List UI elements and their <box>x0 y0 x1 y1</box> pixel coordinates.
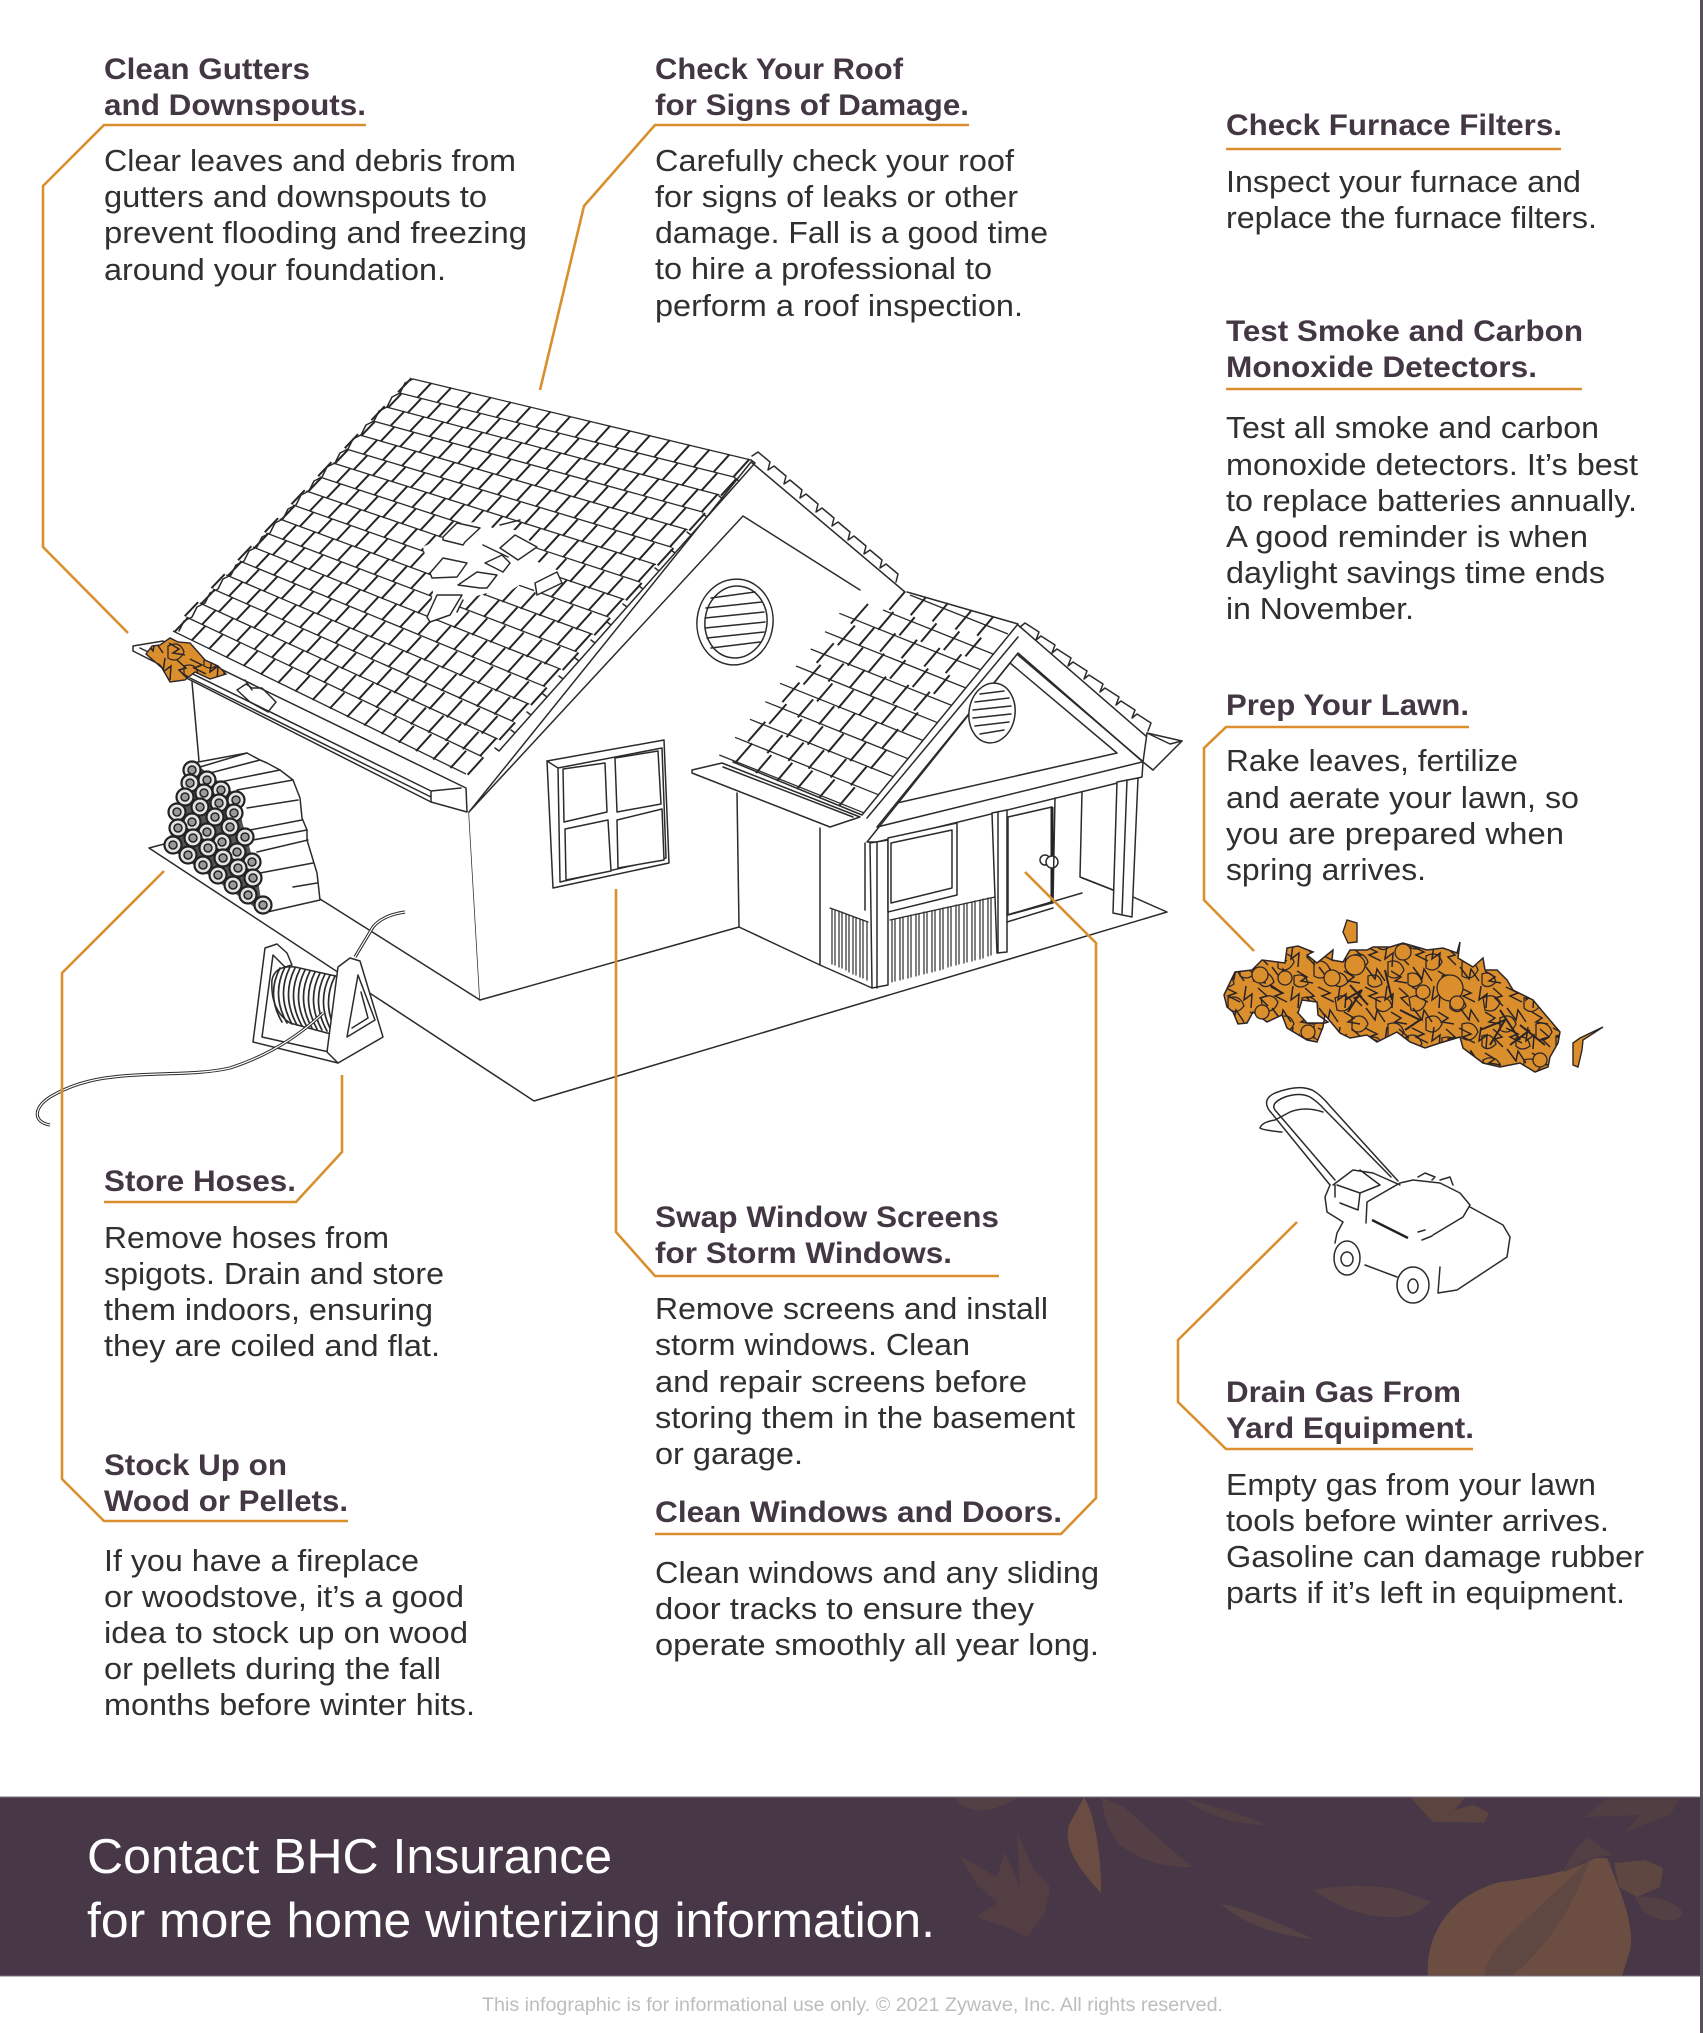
scribbled leaf detail <box>1224 942 1560 1072</box>
heading: and Downspouts. <box>104 89 366 122</box>
callout line: gutters <box>43 125 366 633</box>
body <box>104 1543 475 1722</box>
callout line: furnace <box>1226 148 1561 150</box>
body: storing them in the basement <box>655 1400 1075 1435</box>
body <box>104 1220 444 1363</box>
small roof shingles <box>719 592 1018 815</box>
body: spigots. Drain and store <box>104 1256 444 1291</box>
log sides <box>193 753 320 913</box>
body: damage. Fall is a good time <box>655 215 1048 250</box>
body: Gasoline can damage rubber <box>1226 1539 1644 1574</box>
front wall and main gable <box>469 516 895 1000</box>
heading: Check Furnace Filters. <box>1226 109 1562 142</box>
body <box>1226 1467 1644 1610</box>
text block: clean gutters <box>104 53 527 287</box>
body: idea to stock up on wood <box>104 1615 468 1650</box>
main roof shingles <box>171 378 755 775</box>
body: to hire a professional to <box>655 251 992 286</box>
heading: Monoxide Detectors. <box>1226 351 1537 384</box>
body: and aerate your lawn, so <box>1226 780 1579 815</box>
upper hose <box>355 912 405 957</box>
illustration: leaf pile <box>1224 920 1603 1072</box>
front frame <box>327 958 383 1063</box>
text block: furnace filters <box>1226 109 1597 235</box>
small gable vent <box>965 680 1019 746</box>
body: tools before winter arrives. <box>1226 1503 1609 1538</box>
rear wheel <box>1397 1267 1429 1303</box>
body: Test all smoke and carbon <box>1226 410 1599 445</box>
body <box>655 143 1048 323</box>
callout line: lawn <box>1204 727 1469 951</box>
callout line: window screens <box>616 889 999 1276</box>
body: or pellets during the fall <box>104 1651 441 1686</box>
illustration: stacked firewood <box>164 753 320 914</box>
gutter leaves clog <box>146 638 226 682</box>
banner text: Contact BHC Insurance <box>87 1830 612 1884</box>
callout line: roof <box>540 125 969 390</box>
body: door tracks to ensure they <box>655 1591 1035 1626</box>
heading: for Signs of Damage. <box>655 89 969 122</box>
page edge line <box>1700 0 1703 2033</box>
heading: Prep Your Lawn. <box>1226 689 1469 722</box>
body <box>1226 164 1597 235</box>
heading: Stock Up on <box>104 1449 287 1482</box>
round attic vent <box>691 574 779 670</box>
heading: Drain Gas From <box>1226 1376 1461 1409</box>
recessed wall <box>820 790 1082 985</box>
text block: stock wood <box>104 1449 475 1722</box>
heading: Wood or Pellets. <box>104 1485 348 1518</box>
disclaimer: This infographic is for informational use only. © 2021 Zywave, Inc. All rights reserved. <box>482 1995 1223 2016</box>
lattice fence right <box>890 897 995 982</box>
heading: Clean Gutters <box>104 53 310 86</box>
heading: Test Smoke and Carbon <box>1226 315 1583 348</box>
small rake tiles and end cap <box>1020 623 1182 770</box>
heading: Store Hoses. <box>104 1165 296 1198</box>
porch window <box>888 823 957 912</box>
left gutter <box>133 641 467 812</box>
body <box>104 143 527 287</box>
illustration: lawn mower <box>1260 1088 1510 1303</box>
body: to replace batteries annually. <box>1226 483 1637 518</box>
text block: window screens <box>655 1201 1075 1471</box>
heading: Yard Equipment. <box>1226 1412 1474 1445</box>
heading: Check Your Roof <box>655 53 904 86</box>
decorative leaves <box>954 1797 1683 1976</box>
body: they are coiled and flat. <box>104 1328 440 1363</box>
heading <box>104 53 366 122</box>
lattice fence left <box>830 908 868 980</box>
heading <box>1226 315 1583 384</box>
illustration: hose reel <box>37 912 405 1125</box>
heading <box>655 53 969 122</box>
front wheel <box>1334 1241 1360 1275</box>
body: replace the furnace filters. <box>1226 200 1597 235</box>
log ends <box>164 762 272 914</box>
small gable face <box>867 653 1143 842</box>
hose coil <box>272 967 340 1035</box>
porch posts <box>1113 778 1138 917</box>
body: for signs of leaks or other <box>655 179 1018 214</box>
heading <box>655 1201 999 1270</box>
body <box>655 1291 1075 1471</box>
body: parts if it’s left in equipment. <box>1226 1575 1625 1610</box>
text block: clean windows <box>655 1496 1099 1662</box>
body: gutters and downspouts to <box>104 179 487 214</box>
body: or woodstove, it’s a good <box>104 1579 464 1614</box>
body: you are prepared when <box>1226 816 1564 851</box>
text block: smoke detectors <box>1226 315 1638 626</box>
banner edges <box>0 1797 1700 1976</box>
body: Remove hoses from <box>104 1220 389 1255</box>
text block: prep lawn <box>1226 689 1579 887</box>
body: A good reminder is when <box>1226 519 1588 554</box>
heading <box>1226 1376 1474 1445</box>
gutter debris <box>237 680 276 712</box>
body: Remove screens and install <box>655 1291 1048 1326</box>
body: storm windows. Clean <box>655 1327 970 1362</box>
body: If you have a fireplace <box>104 1543 419 1578</box>
body: spring arrives. <box>1226 852 1426 887</box>
porch and small gable <box>820 625 1153 988</box>
body: perform a roof inspection. <box>655 288 1023 323</box>
body: daylight savings time ends <box>1226 555 1605 590</box>
callout line: windows and doors <box>655 872 1096 1534</box>
footer banner <box>0 1797 1700 1976</box>
body: in November. <box>1226 591 1414 626</box>
body: Carefully check your roof <box>655 143 1014 178</box>
body: around your foundation. <box>104 252 446 287</box>
body: or garage. <box>655 1436 803 1471</box>
text block: check your roof <box>655 53 1048 323</box>
door <box>1008 807 1058 915</box>
body <box>1226 410 1638 626</box>
illustration: house <box>133 378 1182 1101</box>
text block: drain gas <box>1226 1376 1644 1610</box>
callout line: yard equipment <box>1178 1222 1473 1449</box>
lower hose <box>37 1013 323 1125</box>
body <box>1226 743 1579 887</box>
banner text <box>87 1830 935 1948</box>
body: monoxide detectors. It’s best <box>1226 447 1638 482</box>
body: Clean windows and any sliding <box>655 1555 1099 1590</box>
main window <box>547 740 669 888</box>
roof damage patch <box>423 520 562 622</box>
body: them indoors, ensuring <box>104 1292 433 1327</box>
heading: Clean Windows and Doors. <box>655 1496 1062 1529</box>
banner text: for more home winterizing information. <box>87 1894 935 1948</box>
body: Empty gas from your lawn <box>1226 1467 1596 1502</box>
small gutter <box>692 763 860 827</box>
body: Rake leaves, fertilize <box>1226 743 1518 778</box>
heading: Swap Window Screens <box>655 1201 999 1234</box>
stray leaves <box>1343 920 1357 943</box>
callout line: detectors <box>1226 388 1582 390</box>
body: prevent flooding and freezing <box>104 215 527 250</box>
mower handle <box>1260 1088 1398 1185</box>
left wall <box>192 682 480 1000</box>
foundation slab <box>149 843 1167 1101</box>
body: operate smoothly all year long. <box>655 1627 1099 1662</box>
body: months before winter hits. <box>104 1687 475 1722</box>
mower body <box>1325 1170 1510 1293</box>
body: Clear leaves and debris from <box>104 143 516 178</box>
dense dark scribbles <box>1270 970 1545 1045</box>
callout line: hoses <box>104 1075 342 1202</box>
body: and repair screens before <box>655 1364 1027 1399</box>
body: Inspect your furnace and <box>1226 164 1581 199</box>
main rake tiles <box>752 452 898 582</box>
back frame <box>253 944 338 1063</box>
heading: for Storm Windows. <box>655 1237 952 1270</box>
body <box>655 1555 1099 1662</box>
text block: store hoses <box>104 1165 444 1363</box>
heading <box>104 1449 348 1518</box>
callout line: wood <box>62 871 348 1521</box>
large leaves <box>1252 944 1547 1067</box>
